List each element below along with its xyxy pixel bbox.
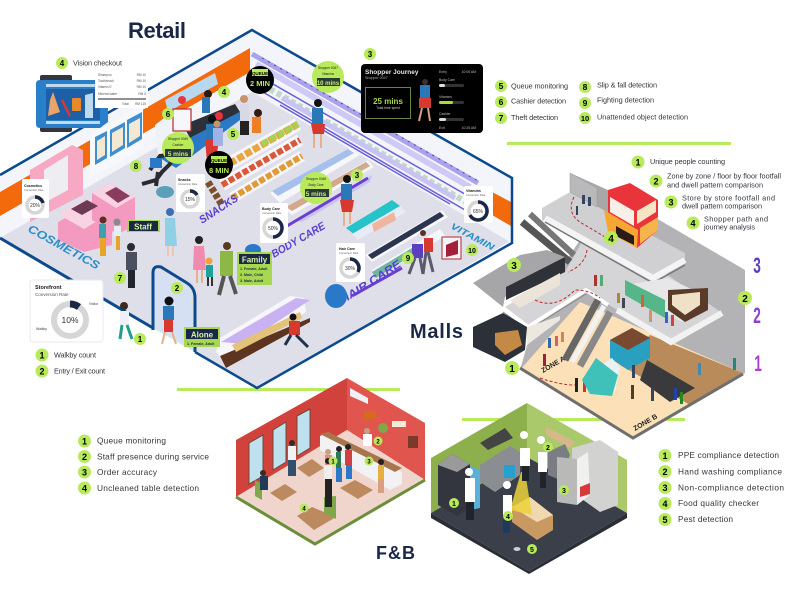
F&B left legend: Staff presence during service [97,452,209,462]
conversion card: body care: 50% [268,226,279,232]
retail markers: 10 [468,248,476,255]
shopper bubble: cashier [162,132,194,164]
conversion card: snacks [176,174,205,212]
queue timer 2 min [246,66,274,94]
conversion card: vitamins: Conversion Rate [466,193,486,197]
tables [270,459,373,530]
panel: retail store isometric [0,30,512,388]
kitchen markers [449,442,569,554]
storefront conversion card: Walkby [36,327,47,331]
retail markers: 3 [355,171,360,180]
retail legend: detection list: 5 [499,81,504,91]
shopper journey panel: Entry [439,70,447,74]
storefront conversion card: 10% [61,315,79,325]
queue timer 8 min [205,151,233,179]
prep sink [548,444,570,480]
F&B left legend: 2 [82,452,87,462]
label: staff [127,220,160,232]
stand displays [245,244,347,308]
vision checkout legend [56,57,122,69]
floor aisle labels: SNACKS [197,192,241,227]
receipt: Mineral water [98,92,118,96]
shopper path dashed [535,197,610,385]
shopper bubble: vitamins [312,61,344,93]
stove counter [480,446,520,492]
floor [431,457,627,571]
shopper journey panel [361,64,483,133]
retail legend: detection list: Cashier detection [511,96,566,106]
floor aisle labels: BODY CARE [270,220,328,261]
service counter [320,432,402,490]
wall shelf [546,427,575,448]
panel: kitchen isometric [431,403,627,574]
retail legend: detection list: Unattended object detection [597,112,688,122]
retail legend: detection list: Queue monitoring [511,82,568,90]
ground floor [520,302,743,437]
conversion card: vitamins [464,186,493,223]
fridge [557,440,618,512]
mall markers: 4 [608,234,614,245]
retail markers: 9 [406,254,411,263]
lift doors [570,173,597,207]
prep table [512,497,553,540]
retail legend: detection list [495,80,688,124]
malls legend: dwell pattern comparison [682,202,762,210]
receipt [95,70,148,108]
title: F&B: F&B [376,543,415,563]
vision checkout legend: Vision checkout [73,58,122,68]
receipt: Shampoo [98,73,112,77]
kitchen markers: 2 [546,445,550,452]
air conditioner [350,388,368,404]
label: family: 2. Male, Child [240,273,263,277]
shopper journey panel: Body Care [439,78,455,82]
pest [514,547,520,551]
mall floor numbers: 2 [753,303,761,328]
restaurant markers: 3 [367,460,371,466]
restaurant markers: 1 [331,460,335,466]
F&B right legend: 2 [662,467,668,477]
mall floor numbers: 3 [753,253,761,278]
zone labels on floor [540,356,659,433]
right wall [252,30,512,243]
conversion card: snacks: Conversion Rate [178,182,198,186]
floor aisle labels: COSMETICS [26,223,102,273]
left store lower [473,313,527,362]
shopper journey panel: Cashier [439,112,452,116]
wall shelving [252,54,478,210]
shopper journey panel: 10:00 AM [462,70,476,74]
F&B left legend [78,434,209,494]
conversion card: vitamins: 65% [473,209,484,215]
F&B right legend [658,449,784,526]
chefs [465,431,547,533]
marker 3 for shopper journey [364,48,376,60]
conversion card: cosmetics: Cosmetics [24,184,42,188]
escalators [522,214,610,366]
mall markers [505,231,752,375]
conversion card: hair care: 30% [345,266,356,272]
kitchen markers: 4 [506,514,510,521]
restaurant markers: 2 [376,440,380,446]
shopper bubble: vitamins: 10 mins [317,81,340,87]
conversion card: snacks: Snacks [178,178,191,182]
label: staff: Staff [134,222,152,232]
F&B left legend: Uncleaned table detection [97,483,199,493]
conversion card: body care: Conversion Rate [262,211,282,215]
malls legend: journey analysis [703,222,755,232]
retail markers: 8 [134,162,139,171]
F&B left legend: 3 [82,468,87,478]
shopper bubble: vitamins: Shopper 0047 [318,66,338,70]
F&B left legend: Queue monitoring [97,436,166,446]
receipt: RM 10 [137,85,146,89]
ground shops [610,328,650,370]
floor aisle labels [26,192,497,307]
hair care shelves [346,200,448,296]
shopper bubble: cashier: Cashier [173,143,184,147]
retail legend: detection list: 6 [499,97,504,107]
mall teal kiosk [582,358,618,396]
storefront conversion card: Conversion Rate [35,292,69,297]
mall markers: 1 [509,364,515,375]
shopper bubble: body care: Shopper 0048 [306,177,326,181]
conversion card: hair care: Hair Care [339,247,355,251]
retail legend: detection list: Fighting detection [597,96,654,104]
receipt: RM 5 [138,92,146,96]
mall floor numbers: 1 [754,351,762,376]
range hood [480,428,513,450]
F&B right legend: Non-compliance detection [678,482,784,492]
shopper bubble: body care: 5 mins [306,191,327,198]
label: alone: Alone [191,330,214,340]
malls legend: and dwell pattern comparison [667,180,763,190]
retail markers [114,86,478,345]
malls legend: Store by store footfall and [682,194,775,202]
receipt: RM 10 [137,79,146,83]
vision checkout legend: 4 [60,59,65,68]
windows [249,409,310,484]
vision checkout tablet [36,75,108,132]
storefront legend [36,348,105,378]
floor border and door [0,238,153,328]
F&B left legend: 4 [82,484,87,494]
mall markers: 3 [511,261,517,272]
shoppers and staff figures [99,90,433,347]
mall people [543,195,736,404]
label: family: 3. Male, Adult [240,279,264,283]
shopper journey panel: Total time spent [376,106,400,110]
label: alone [184,327,220,347]
mall markers: 2 [742,294,748,305]
queue timer 8 min: QUEUE [211,158,227,163]
queue timer 2 min: QUEUE [252,71,268,76]
conversion card: body care [260,203,288,243]
label: family [237,252,272,285]
malls legend: 1 [635,158,641,168]
storefront conversion card: Storefront [35,285,62,291]
shopper bubble: vitamins: Vitamins [322,72,334,76]
storefront legend: Entry / Exit count [54,366,105,376]
retail markers: 7 [118,274,123,283]
upper deck [542,192,685,280]
shopper bubble: cashier: Shopper 0049 [168,137,188,141]
storefront legend: 1 [39,350,45,360]
panel: mall isometric [473,173,745,438]
retail markers: 6 [166,110,171,119]
queue timer 8 min: 8 MIN [209,166,229,175]
upper lobby stores [625,278,708,322]
storefront conversion card: Visitor [89,302,99,306]
title: Retail: Retail [128,18,186,43]
F&B right legend: 3 [662,483,668,493]
storefront legend: Walkby count [54,350,96,360]
F&B right legend: Hand washing compliance [678,466,782,476]
conversion card: hair care: Conversion Rate [339,251,359,255]
receipt: Toothbrush [98,79,114,83]
kitchen markers: 1 [452,501,456,508]
retail legend: detection list: Theft detection [511,113,558,122]
walls [431,403,527,513]
storefront legend: 2 [39,366,45,376]
title: Malls: Malls [410,321,463,343]
retail markers: 1 [138,335,143,344]
F&B left legend: 1 [82,436,87,446]
conversion card: hair care [336,243,365,282]
conversion card: body care: Body Care [262,207,280,211]
retail legend: detection list: 9 [583,98,588,108]
shopper bubble: body care [300,172,332,204]
conversion card: snacks: 15% [185,197,196,203]
red shop [604,183,658,248]
label: family: 1. Female, Adult [240,267,268,271]
receipt: RM 10 [137,73,146,77]
back wall [520,190,745,438]
retail markers: 2 [175,284,180,293]
shopper bubble: cashier: 5 mins [168,151,189,158]
retail legend: detection list: 7 [499,113,504,123]
kitchen markers: 5 [530,547,534,554]
marker 3 for shopper journey: 3 [368,50,373,59]
retail markers: 5 [231,130,236,139]
conversion card: cosmetics: Conversion Rate [24,188,44,192]
walls [236,378,347,497]
F&B right legend: 1 [662,451,668,461]
kitchen markers: 3 [562,488,566,495]
malls legend: 3 [668,198,674,208]
product cart display [216,296,310,368]
label: family: Family [242,256,268,264]
seats [255,480,336,519]
malls legend: Shopper path and [704,214,768,224]
floor [236,430,425,545]
zone labels on floor: ZONE B [632,413,659,433]
oven [438,454,470,516]
shopper journey panel: Shopper Journey [365,69,419,76]
retail markers: 4 [222,88,227,97]
retail legend: detection list: Slip & fall detection [597,80,657,90]
F&B right legend: 4 [662,499,668,509]
light beam and food [510,472,532,515]
conversion card: vitamins: Vitamins [466,189,481,193]
shopper journey panel: Shopper 0047 [365,76,388,80]
checkout counter [155,73,240,168]
mall floor numbers [753,253,762,376]
shopper journey panel: Vitamins [439,95,452,99]
middle deck [503,240,722,342]
storefront conversion card [30,280,103,342]
conversion card: cosmetics: 20% [30,203,41,209]
restaurant markers: 4 [302,506,306,512]
receipt: Total [122,102,129,106]
left wall [0,30,252,238]
label: alone: 1. Female, Adult [187,342,215,346]
restaurant people [260,428,384,507]
restaurant markers [300,436,382,512]
cosmetics area [30,145,135,252]
conversion card: cosmetics [22,179,49,218]
panel: restaurant isometric [236,378,425,545]
F&B left legend: Order accuracy [97,467,158,477]
F&B right legend: Pest detection [678,514,733,524]
unattended bag [442,237,461,259]
shopper journey panel: Exit [439,126,445,130]
body care shelves [270,148,374,226]
queue timer 2 min: 2 MIN [250,79,270,88]
malls legend: 2 [653,176,659,186]
floor [0,90,512,388]
receipt: RM 115 [135,102,146,106]
left store upper [473,250,565,307]
malls legend: Zone by zone / floor by floor footfall [667,172,781,180]
F&B right legend: 5 [662,515,668,525]
wall decor [364,411,418,448]
malls legend [632,156,781,232]
snacks shelves [208,124,302,205]
malls legend: Unique people counting [650,157,725,166]
shopper bubble: body care: Body Care [308,183,324,187]
floor aisle labels: HAIR CARE [338,258,404,307]
floor aisle labels: VITAMIN [449,221,497,253]
shopper journey panel: 25 mins [373,97,403,106]
retail legend: detection list: 8 [583,82,588,92]
zone labels on floor: ZONE A [540,356,567,375]
shopper journey panel: 10:25 AM [462,126,476,130]
malls legend: 4 [690,218,696,228]
receipt: Vitamin E [98,85,112,89]
F&B right legend: PPE compliance detection [678,450,779,460]
retail legend: detection list: 10 [581,114,589,123]
F&B right legend: Food quality checker [678,498,759,508]
